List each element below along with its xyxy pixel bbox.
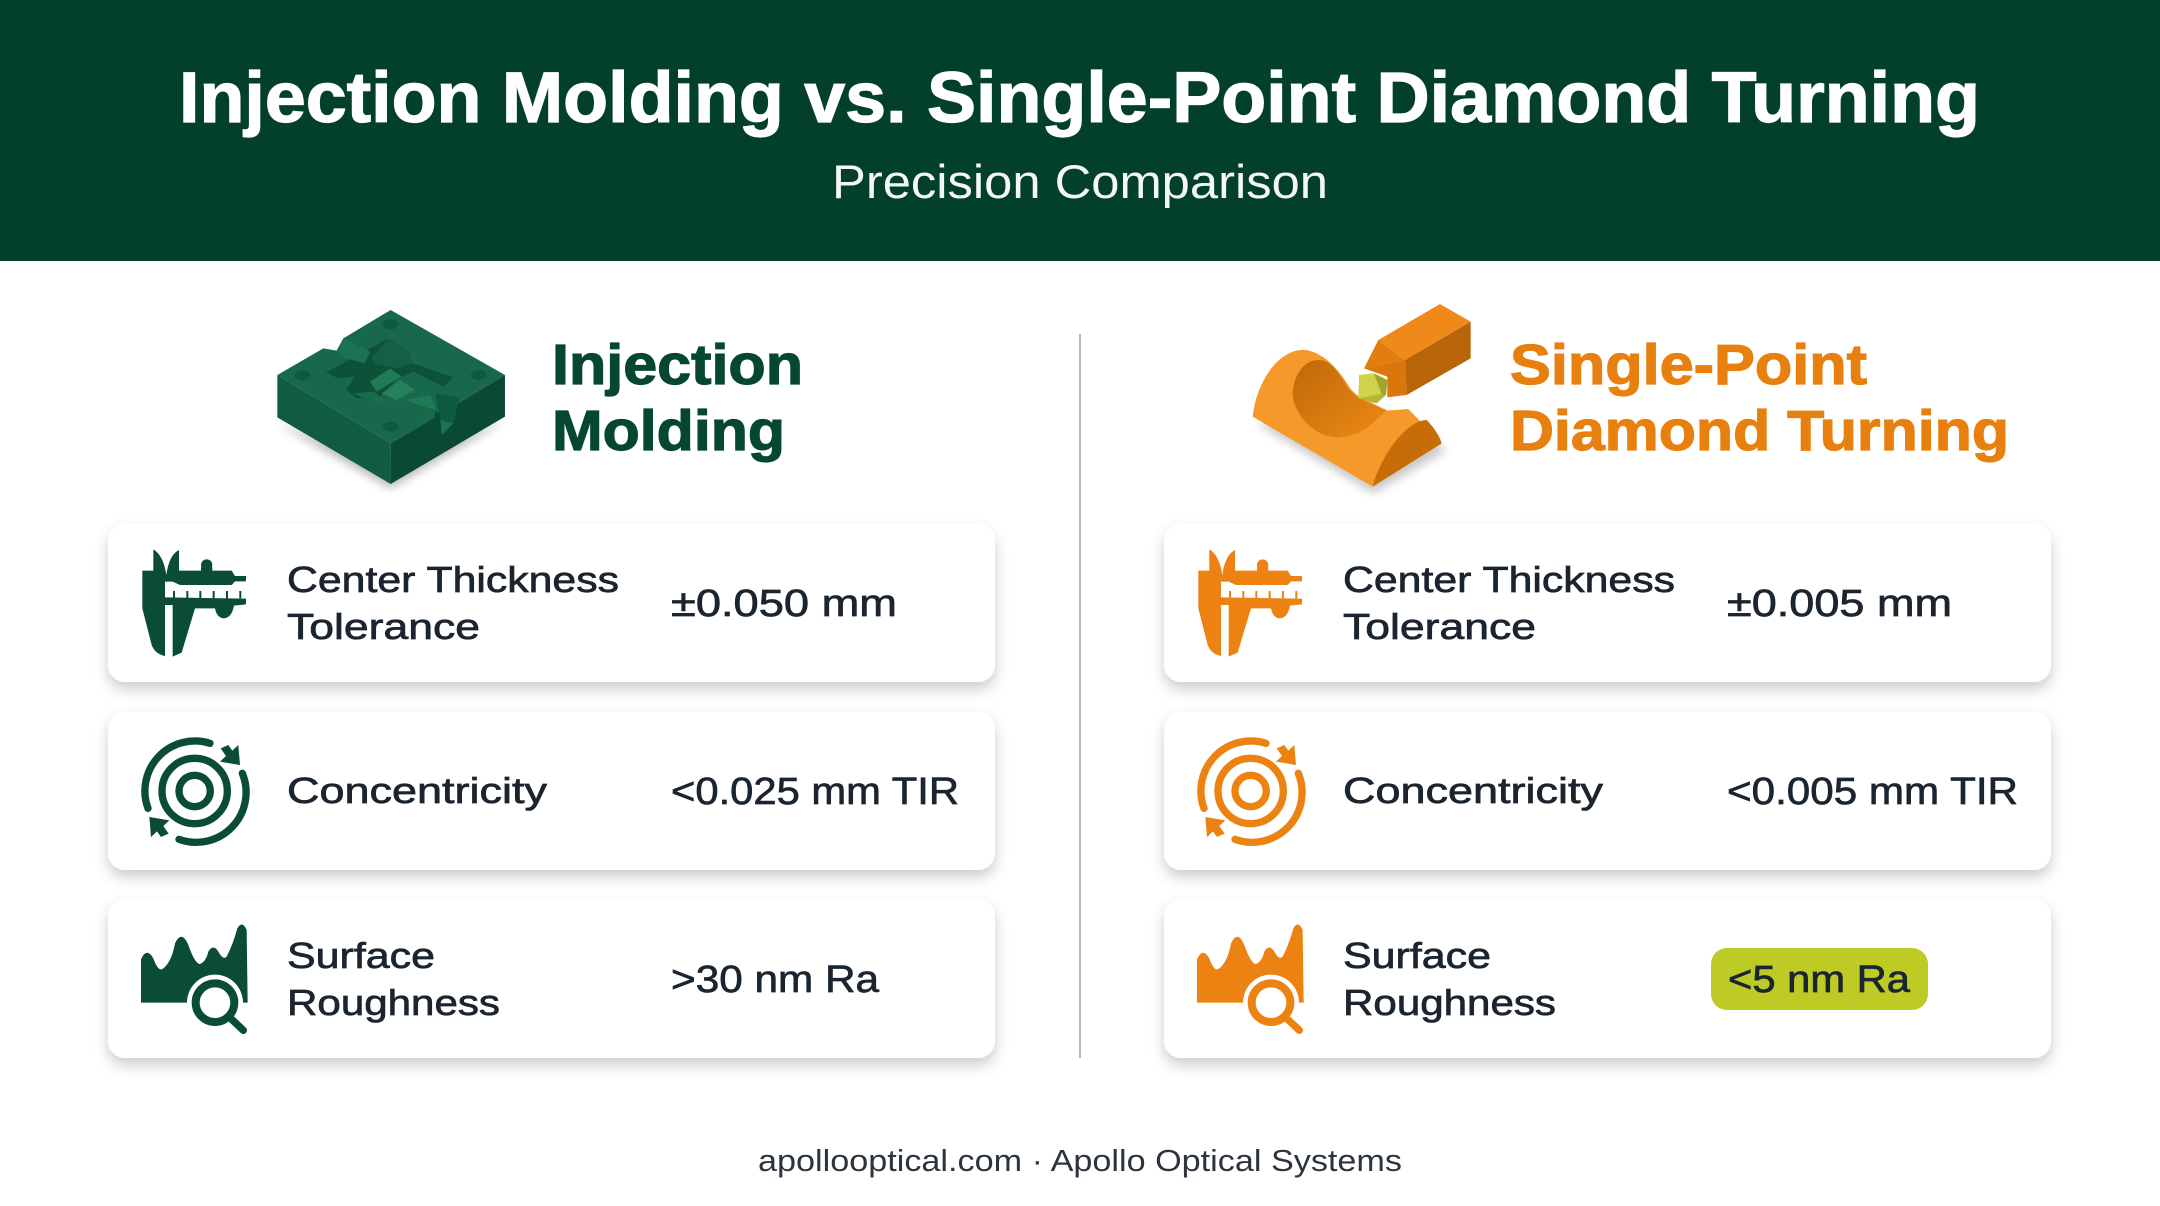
label: center thickness tolerance [1343,559,1675,647]
title: Injection Molding vs. Single-Point Diamond Turning [179,59,1980,138]
card: center thickness tolerance [108,524,995,682]
header banner [0,0,2160,261]
card: concentricity [108,712,995,870]
label: center thickness tolerance: Center Thickness [1343,559,1675,600]
panel: single-point diamond turning [1164,304,2051,1058]
panel: injection molding [108,310,995,1058]
heading: Single-Point Diamond Turning: Single-Point [1510,333,1867,397]
label: center thickness tolerance [287,559,619,647]
value: <0.005 mm TIR: <0.005 mm TIR [1727,771,2018,813]
card: surface roughness [108,899,995,1058]
icon: caliper [142,549,246,657]
card: surface roughness [1164,899,2051,1058]
highlighted value: <5 nm Ra [1711,948,1928,1010]
icon: caliper [1198,549,1302,657]
label: surface roughness: Roughness [287,982,500,1023]
heading: Single-Point Diamond Turning [1510,333,2009,463]
center divider line [1079,334,1081,1058]
heading: Injection Molding [552,333,803,463]
label: surface roughness: Surface [287,935,435,976]
value: <0.025 mm TIR: <0.025 mm TIR [671,771,959,813]
heading: Single-Point Diamond Turning: Diamond Turning [1510,399,2009,463]
label: surface roughness [287,935,500,1023]
icon: surface profile with magnifier [1197,925,1309,1033]
label: surface roughness: Surface [1343,935,1491,976]
label: surface roughness [1343,935,1556,1023]
value: >30 nm Ra: >30 nm Ra [671,959,880,1001]
card: concentricity [1164,712,2051,870]
subtitle: Precision Comparison [832,155,1328,208]
label: center thickness tolerance: Center Thickness [287,559,619,600]
value: ±0.005 mm: ±0.005 mm [1727,583,1952,625]
label: center thickness tolerance: Tolerance [287,606,480,647]
label: concentricity: Concentricity [287,770,547,811]
value: ±0.050 mm: ±0.050 mm [671,583,897,625]
label: surface roughness: Roughness [1343,982,1556,1023]
icon: concentric rings [1201,741,1302,842]
illustration: diamond tool cutting workpiece [1253,304,1471,493]
card: center thickness tolerance [1164,524,2051,682]
illustration: injection mold block [277,310,507,488]
label: concentricity: Concentricity [1343,770,1603,811]
highlighted value: <5 nm Ra: <5 nm Ra [1728,959,1911,1001]
icon: surface profile with magnifier [141,925,253,1033]
footer: apollooptical.com · Apollo Optical Systems [758,1143,1402,1178]
heading: Injection Molding: Injection [552,333,803,397]
heading: Injection Molding: Molding [552,399,785,463]
label: center thickness tolerance: Tolerance [1343,606,1536,647]
icon: concentric rings [145,741,246,842]
